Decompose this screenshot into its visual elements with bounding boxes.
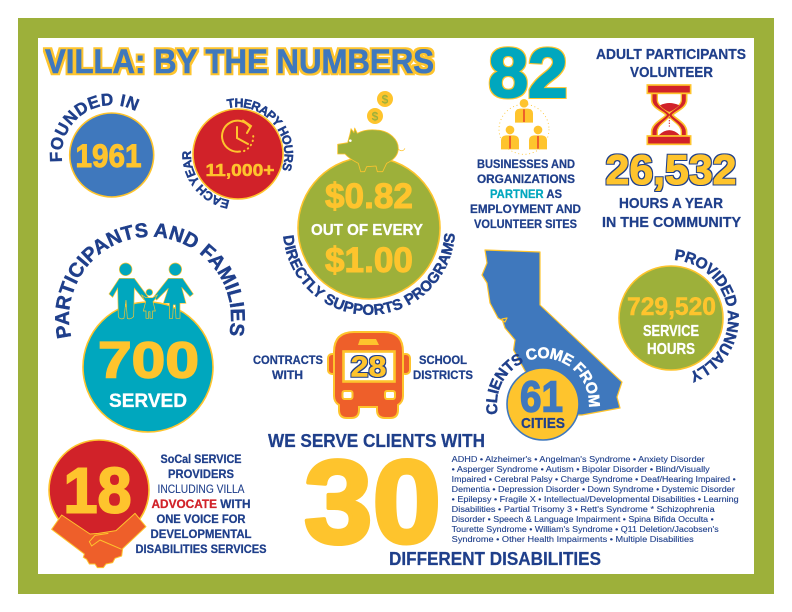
panel: 30 different disabilities: WE SERVE CLIENTS WITH bbox=[268, 431, 485, 451]
panel: service hours bbox=[618, 249, 739, 383]
founded in 1961 badge: 1961 bbox=[76, 138, 142, 174]
panel: 82 partners: 82 bbox=[488, 34, 568, 112]
panel: adult participants volunteer bbox=[596, 47, 746, 231]
list of disabilities: Disabilities • Partial Trisomy 3 • Rett's Syndrome * Schizophrenia bbox=[452, 504, 715, 514]
panel: participants and families: SERVED bbox=[109, 391, 187, 412]
providers text: ONE VOICE FOR bbox=[156, 514, 246, 526]
founded in 1961 badge: FOUNDED IN bbox=[50, 94, 140, 162]
list of disabilities: • Asperger Syndrome • Autism • Bipolar Disorder • Blind/Visually bbox=[452, 464, 710, 474]
icon: business people bbox=[499, 99, 549, 154]
panel: clients come from 61 cities: 61 bbox=[520, 372, 563, 422]
panel: directly supports programs: $0.82 bbox=[325, 177, 413, 216]
panel: adult participants volunteer: IN THE COMMUNITY bbox=[602, 214, 741, 231]
list of disabilities: ADHD • Alzheimer's • Angelman's Syndrome • Anxiety Disorder bbox=[452, 454, 705, 464]
partner description: EMPLOYMENT AND bbox=[470, 202, 581, 216]
providers text: DEVELOPMENTAL bbox=[150, 529, 252, 541]
panel: directly supports programs: $1.00 bbox=[325, 241, 413, 280]
list of disabilities: Impaired • Cerebral Palsy • Charge Syndrome • Deaf/Hearing Impaired • bbox=[452, 474, 736, 484]
panel: adult participants volunteer: 26,532 bbox=[606, 146, 736, 193]
panel: school districts bus: DISTRICTS bbox=[413, 368, 473, 382]
icon: family bbox=[109, 263, 193, 319]
list of disabilities: Tourette Syndrome • William's Syndrome • Q11 Deletion/Jacobsen's bbox=[452, 524, 719, 534]
panel: school districts bus: CONTRACTS bbox=[253, 353, 323, 367]
providers text: SoCal SERVICE bbox=[160, 454, 242, 466]
partner description: BUSINESSES AND bbox=[477, 157, 575, 171]
panel: service hours: 729,520 bbox=[627, 293, 716, 321]
panel: 18 socal service providers: 18 bbox=[64, 454, 132, 526]
founded in 1961 badge bbox=[50, 94, 154, 198]
panel: school districts bus: SCHOOL bbox=[419, 353, 467, 367]
partner description: PARTNER AS bbox=[490, 187, 562, 201]
panel: service hours: SERVICE bbox=[643, 323, 699, 340]
panel: clients come from 61 cities bbox=[481, 249, 623, 441]
california map bbox=[482, 250, 622, 415]
panel: 30 different disabilities bbox=[268, 431, 739, 569]
panel: adult participants volunteer: VOLUNTEER bbox=[630, 65, 713, 81]
icon: falling coins bbox=[367, 91, 393, 124]
icon: hourglass bbox=[647, 85, 691, 144]
panel: service hours: HOURS bbox=[647, 341, 695, 358]
partner description bbox=[470, 157, 581, 231]
panel: directly supports programs: OUT OF EVERY bbox=[311, 222, 423, 239]
therapy hours badge bbox=[182, 98, 294, 209]
panel: 18 socal service providers bbox=[49, 440, 267, 568]
therapy hours badge: THERAPY HOURS bbox=[226, 98, 294, 172]
panel: clients come from 61 cities: CITIES bbox=[521, 415, 565, 432]
icon: piggy bank bbox=[338, 128, 405, 172]
panel: participants and families: PARTICIPANTS AND FAMILIES bbox=[55, 223, 246, 338]
icon: clock bbox=[222, 120, 253, 152]
providers text bbox=[136, 454, 267, 556]
icon: falling coins: $ bbox=[372, 110, 379, 124]
partner description: VOLUNTEER SITES bbox=[474, 217, 577, 231]
panel: 30 different disabilities: DIFFERENT DISABILITIES bbox=[389, 549, 601, 569]
panel: directly supports programs: DIRECTLY SUPPORTS PROGRAMS bbox=[283, 233, 455, 316]
panel: school districts bus: 28 bbox=[350, 352, 386, 384]
providers text: INCLUDING VILLA bbox=[158, 484, 245, 496]
panel: participants and families bbox=[55, 223, 246, 433]
title: VILLA: BY THE NUMBERS bbox=[45, 43, 434, 81]
panel: 30 different disabilities: 30 bbox=[304, 436, 441, 568]
list of disabilities: Disorder • Speech & Language Impairment • Spina Bifida Occulta • bbox=[452, 514, 714, 524]
providers text: PROVIDERS bbox=[168, 469, 234, 481]
panel: clients come from 61 cities: CLIENTS COME FROM bbox=[486, 347, 600, 414]
panel: school districts bus: WITH bbox=[272, 368, 303, 382]
list of disabilities: Syndrome • Other Health Impairments • Multiple Disabilities bbox=[452, 534, 694, 544]
list of disabilities: • Epilepsy • Fragile X • Intellectual/Developmental Disabilities • Learning bbox=[452, 494, 739, 504]
panel: participants and families: 700 bbox=[98, 332, 199, 388]
list of disabilities: Dementia • Depression Disorder • Down Syndrome • Dystemic Disorder bbox=[452, 484, 735, 494]
panel: school districts bus bbox=[253, 332, 473, 418]
providers text: DISABILITIES SERVICES bbox=[136, 544, 267, 556]
panel: service hours: PROVIDED ANNUALLY bbox=[674, 249, 739, 383]
therapy hours badge: 11,000+ bbox=[206, 160, 274, 180]
providers text: ADVOCATE WITH bbox=[152, 499, 251, 511]
panel: directly supports programs bbox=[283, 128, 455, 316]
panel: 82 partners bbox=[470, 34, 581, 231]
panel: adult participants volunteer: HOURS A YEAR bbox=[619, 195, 723, 212]
icon: falling coins: $ bbox=[382, 92, 389, 106]
panel: adult participants volunteer: ADULT PARTICIPANTS bbox=[596, 47, 746, 63]
list of disabilities bbox=[452, 454, 739, 544]
icon: bus bbox=[328, 332, 410, 418]
icon: handshake bbox=[52, 513, 146, 568]
partner description: ORGANIZATIONS bbox=[477, 172, 575, 186]
therapy hours badge: EACH YEAR bbox=[182, 150, 230, 209]
